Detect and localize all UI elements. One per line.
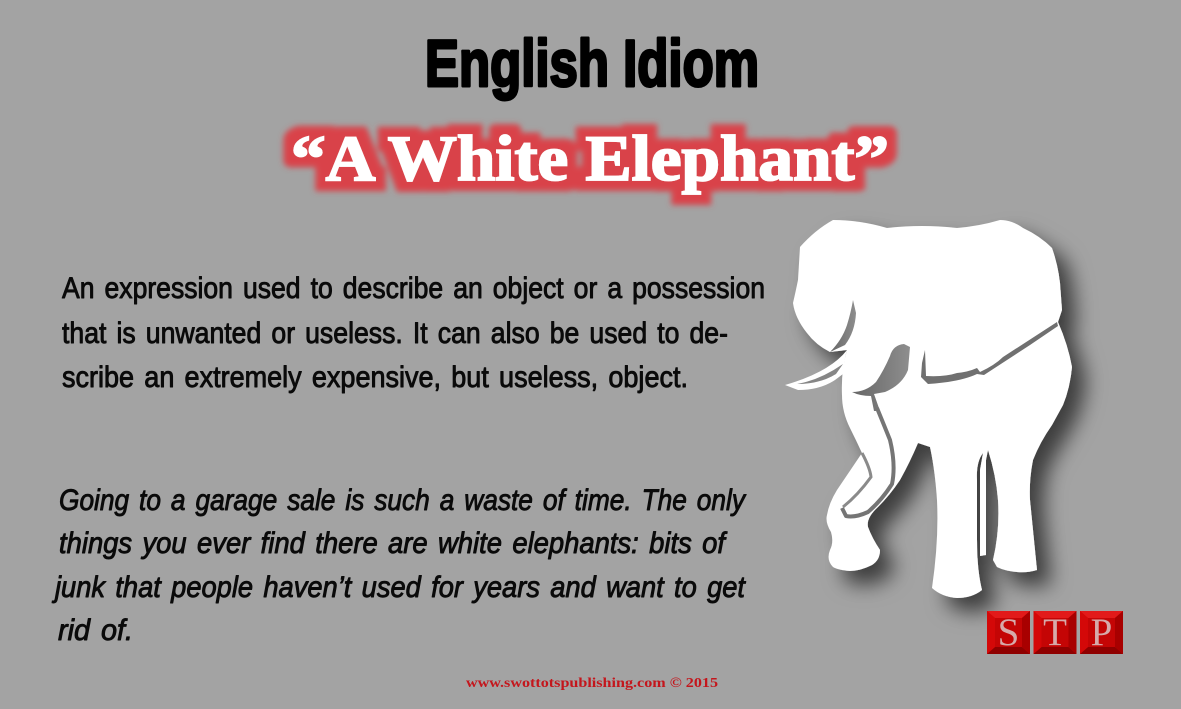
trunk crease xyxy=(842,408,894,516)
logo tile S: S xyxy=(998,611,1019,654)
definition text: scribe an extremely expensive, but useless, object. xyxy=(62,361,688,394)
elephant silhouette xyxy=(793,220,1072,598)
ear lower crease xyxy=(921,322,1058,384)
definition text xyxy=(62,272,765,394)
title: English Idiom xyxy=(425,26,759,100)
logo tile T: T xyxy=(1043,611,1067,654)
logo tile P: P xyxy=(1091,611,1112,654)
subtitle with red glow: “A White Elephant” xyxy=(291,123,889,195)
footer credit: www.swottotspublishing.com © 2015 xyxy=(466,676,718,691)
mouth crease xyxy=(852,344,910,411)
elephant illustration xyxy=(785,220,1072,598)
example text: rid of. xyxy=(58,614,133,647)
example text: junk that people haven’t used for years and want to get xyxy=(51,571,747,604)
example text xyxy=(51,484,747,647)
example text: Going to a garage sale is such a waste of time. The only xyxy=(59,484,747,517)
ear crease xyxy=(830,300,856,352)
definition text: that is unwanted or useless. It can also be used to de- xyxy=(62,317,728,350)
tusk xyxy=(785,350,847,390)
leg crease xyxy=(843,453,871,507)
definition text: An expression used to describe an object or a possession xyxy=(62,272,765,305)
example text: things you ever find there are white elephants: bits of xyxy=(59,527,727,560)
STP logo xyxy=(987,611,1123,654)
tusk shading xyxy=(797,364,843,384)
